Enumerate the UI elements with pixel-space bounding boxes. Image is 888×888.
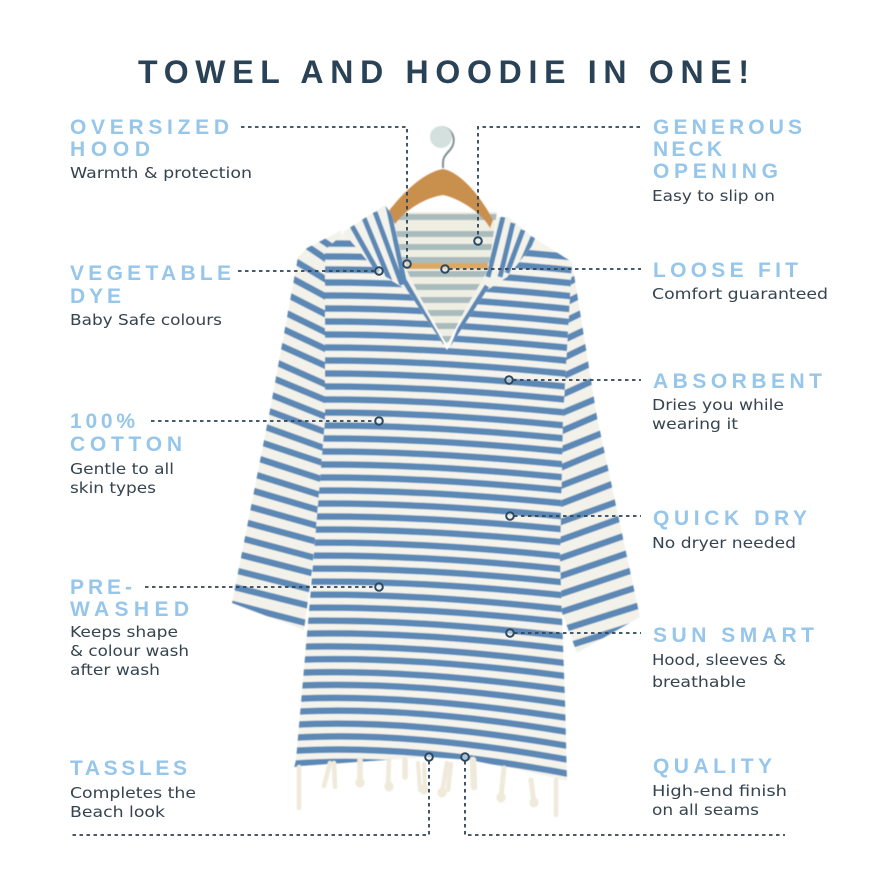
marker — [375, 267, 383, 275]
hanger hook — [430, 126, 454, 168]
description: No dryer needed — [652, 534, 796, 552]
marker — [441, 265, 449, 273]
garment body with stripes — [290, 232, 580, 790]
leader line — [238, 270, 375, 272]
heading — [70, 116, 229, 161]
left hood flap — [343, 205, 447, 350]
callout: 100% cotton — [70, 410, 383, 497]
heading: LOOSE FIT — [653, 259, 798, 282]
leader line — [465, 761, 785, 835]
leader line — [449, 268, 641, 270]
marker — [403, 260, 411, 268]
callout: loose fit — [441, 259, 828, 303]
callout: vegetable dye — [70, 262, 383, 329]
description — [652, 651, 786, 691]
description: Beach look — [70, 803, 165, 821]
heading: SUN SMART — [653, 624, 814, 647]
description — [652, 396, 784, 433]
leader line — [478, 127, 640, 237]
wooden hanger — [388, 169, 493, 269]
callout: oversized hood — [70, 116, 411, 268]
callout: sun smart — [506, 624, 814, 691]
marker — [375, 417, 383, 425]
hoodie photo illustration — [232, 126, 640, 818]
heading: TASSLES — [70, 757, 187, 780]
heading — [70, 262, 231, 308]
marker — [474, 237, 482, 245]
leader line — [241, 127, 407, 261]
heading — [70, 410, 182, 456]
heading: COTTON — [70, 433, 182, 456]
description: Gentle to all — [70, 460, 174, 478]
description: on all seams — [652, 801, 759, 819]
description: Baby Safe colours — [70, 311, 222, 329]
description: Comfort guaranteed — [652, 285, 828, 303]
leader line — [514, 515, 641, 517]
callout: tassles — [70, 753, 433, 835]
heading: QUICK DRY — [653, 507, 807, 530]
heading: GENEROUS — [653, 116, 802, 139]
callout: pre-washed — [70, 576, 383, 679]
heading: NECK — [653, 138, 722, 161]
marker — [505, 376, 513, 384]
inner back of hoodie — [394, 211, 498, 344]
description: High-end finish — [652, 782, 787, 800]
heading: 100% — [70, 410, 135, 433]
callout: quality — [461, 753, 787, 835]
description: Hood, sleeves & — [652, 651, 786, 669]
description — [70, 460, 174, 497]
leader line — [145, 586, 375, 588]
callout: absorbent — [505, 370, 822, 433]
description: Keeps shape — [70, 623, 178, 641]
heading: QUALITY — [653, 755, 772, 778]
leader line — [513, 379, 641, 381]
description: Dries you while — [652, 396, 784, 414]
tassels — [299, 760, 556, 815]
marker — [506, 512, 514, 520]
heading — [653, 116, 802, 183]
description: skin types — [70, 479, 156, 497]
title: TOWEL AND HOODIE IN ONE! — [138, 54, 749, 90]
heading: VEGETABLE — [70, 262, 231, 285]
right sleeve — [559, 265, 640, 652]
heading: DYE — [70, 285, 121, 308]
marker — [461, 753, 469, 761]
leader line — [70, 761, 429, 835]
left sleeve — [202, 230, 406, 648]
heading: OPENING — [653, 160, 778, 183]
description: & colour wash — [70, 642, 189, 660]
callout: quick dry — [506, 507, 807, 552]
leader line — [514, 632, 641, 634]
heading: OVERSIZED — [70, 116, 229, 139]
callout: generous neck opening — [474, 116, 802, 245]
description — [70, 623, 189, 679]
description — [70, 784, 196, 821]
marker — [425, 753, 433, 761]
heading: ABSORBENT — [653, 370, 822, 393]
description: Easy to slip on — [652, 187, 775, 205]
description: after wash — [70, 661, 160, 679]
description: Completes the — [70, 784, 196, 802]
heading — [70, 576, 189, 621]
heading: WASHED — [70, 598, 189, 621]
description — [652, 782, 787, 819]
description: wearing it — [652, 415, 738, 433]
description: breathable — [652, 673, 746, 691]
marker — [375, 583, 383, 591]
marker — [506, 629, 514, 637]
heading: PRE- — [70, 576, 132, 599]
description: Warmth & protection — [70, 164, 252, 182]
right hood flap — [450, 217, 537, 347]
leader line — [151, 420, 375, 422]
heading: HOOD — [70, 138, 150, 161]
